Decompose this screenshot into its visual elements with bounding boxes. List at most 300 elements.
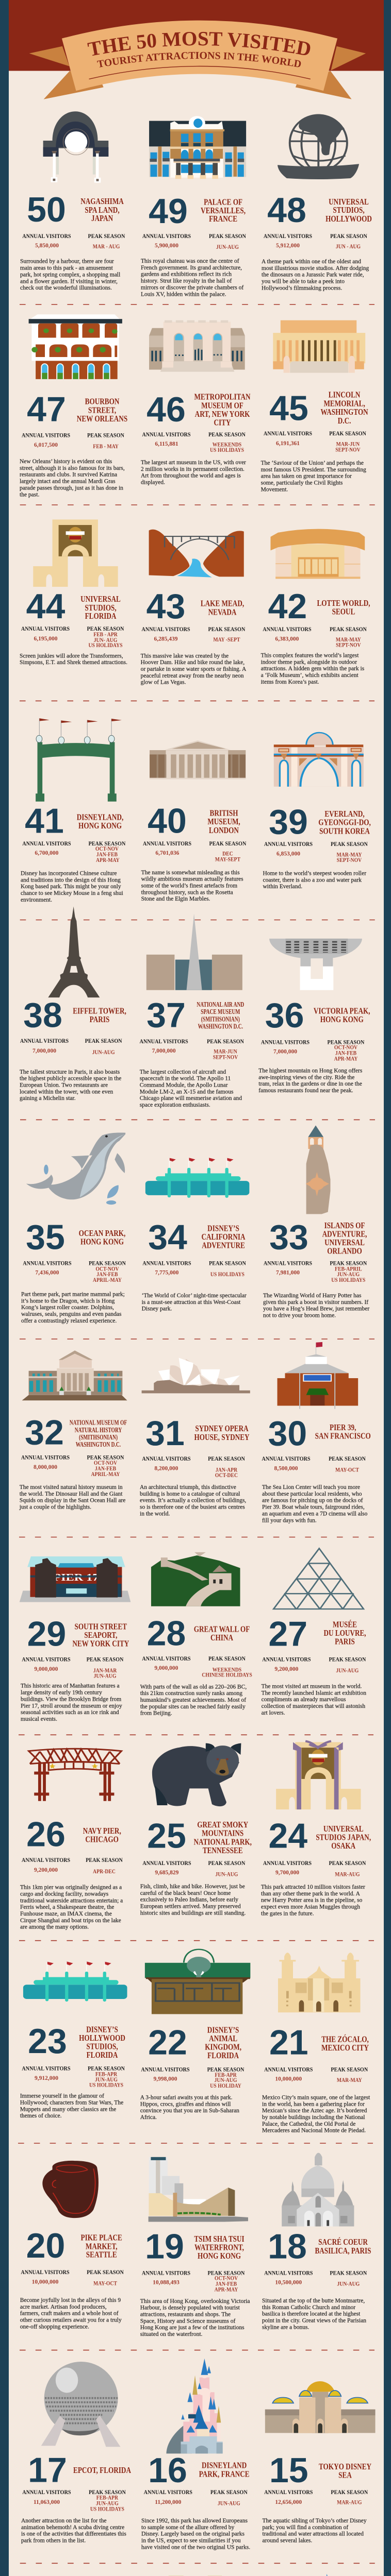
attraction 15 bbox=[262, 2381, 376, 2544]
description: offer a contrastingly relaxed experience. bbox=[21, 1318, 117, 1324]
description: acre market. Artisan food producers, bbox=[20, 2304, 107, 2310]
description: by notable buildings including the National bbox=[262, 2114, 365, 2121]
annual visitors bbox=[144, 2489, 192, 2505]
attraction 38 bbox=[20, 906, 126, 1101]
description: The Wizarding World of Harry Potter has bbox=[263, 1293, 362, 1299]
description: Kong based park. This might be your only bbox=[21, 884, 121, 890]
description: farmers, craft makers and a whole host of bbox=[20, 2311, 119, 2317]
name: NATURAL HISTORY bbox=[75, 1426, 122, 1434]
description: Disney park. bbox=[142, 1306, 172, 1312]
name: SOUTH KOREA bbox=[319, 827, 370, 836]
description: space exploration enthusiasts. bbox=[140, 1102, 210, 1108]
icon: Universal Studios Japan gate bbox=[276, 1741, 361, 1809]
annual visitors bbox=[142, 431, 191, 447]
name: FLORIDA bbox=[207, 2052, 239, 2060]
attraction 17 bbox=[21, 2362, 131, 2544]
description: coaster, there is also a zoo and water park bbox=[263, 877, 362, 883]
name: HONG KONG bbox=[80, 1238, 124, 1247]
rank: 19 bbox=[145, 2227, 184, 2266]
peak season bbox=[329, 430, 366, 453]
description: animation behemoth! A scuba diving centre bbox=[21, 2524, 124, 2531]
peak season: PEAK SEASON bbox=[87, 1656, 124, 1663]
annual visitors: 7,436,000 bbox=[35, 1270, 59, 1276]
description: one-off shopping experience. bbox=[20, 2324, 89, 2330]
name: HONG KONG bbox=[198, 2252, 241, 2261]
peak season: PEAK SEASON bbox=[88, 2065, 125, 2072]
name: (SMITHSONIAN) bbox=[79, 1433, 118, 1442]
rank: 31 bbox=[145, 1414, 185, 1453]
description: This royal chateau was once the centre of bbox=[141, 258, 239, 264]
name: NATIONAL AIR AND bbox=[197, 1000, 245, 1009]
annual visitors: 12,656,000 bbox=[275, 2499, 302, 2505]
name: STUDIOS, bbox=[85, 604, 117, 613]
annual visitors: ANNUAL VISITORS bbox=[142, 1655, 191, 1662]
description: attractions. A hidden gem within the park is bbox=[261, 666, 365, 672]
description: throughout history, such as the Rosetta bbox=[141, 889, 233, 895]
description: Module LM-2, an X-15 and the famous bbox=[140, 1089, 234, 1095]
peak season bbox=[330, 1260, 367, 1283]
peak season: JAN-FEB bbox=[96, 1271, 118, 1278]
description: the highest publicly accessible space in the bbox=[20, 1076, 121, 1082]
annual visitors bbox=[264, 2489, 313, 2505]
peak season: OCT-NOV bbox=[95, 845, 119, 852]
annual visitors bbox=[142, 1860, 191, 1876]
peak season bbox=[208, 1455, 245, 1479]
peak season: MAR-JUN bbox=[214, 1048, 237, 1055]
description: gardens and exhibitions reflect its rich bbox=[141, 272, 232, 278]
name: PARIS bbox=[90, 1015, 109, 1024]
peak season: PEAK SEASON bbox=[330, 233, 367, 240]
name bbox=[194, 2235, 245, 2261]
description: have visited one of the two original US parks. bbox=[141, 2544, 250, 2550]
name bbox=[81, 2233, 122, 2260]
peak season: SEPT-NOV bbox=[336, 642, 361, 649]
attraction 40 bbox=[141, 740, 246, 902]
description: fill your days with fun. bbox=[262, 1517, 317, 1523]
name: PIKE PLACE bbox=[81, 2233, 122, 2243]
rank: 15 bbox=[269, 2451, 308, 2490]
peak season: PEAK SEASON bbox=[328, 1039, 365, 1046]
name: SEA bbox=[338, 2471, 352, 2480]
description: Hollywood; characters from Star Wars, The bbox=[20, 2099, 123, 2106]
peak season: PEAK SEASON bbox=[209, 1260, 246, 1267]
name: PARIS bbox=[335, 1637, 355, 1647]
annual visitors: 7,981,000 bbox=[276, 1270, 300, 1276]
annual visitors bbox=[142, 1455, 191, 1471]
name: DU LOUVRE, bbox=[323, 1629, 366, 1638]
attraction 21 bbox=[262, 1953, 370, 2134]
name: MUSEUM, bbox=[207, 818, 240, 826]
description: Hoover Dam. Hike and bike round the lake, bbox=[141, 659, 245, 666]
peak season: JAN-MAR bbox=[93, 1667, 117, 1674]
description: European settlers arrived. Many preserved bbox=[140, 1904, 241, 1910]
description: you will be able to take a peek into bbox=[262, 279, 345, 285]
peak season bbox=[329, 1860, 366, 1878]
annual visitors: ANNUAL VISITORS bbox=[139, 1038, 188, 1045]
annual visitors bbox=[263, 626, 312, 642]
peak season bbox=[87, 1656, 124, 1680]
description: Space, History and Science museums of bbox=[140, 2318, 235, 2324]
peak season: FEB - MAY bbox=[93, 443, 119, 450]
name: MEXICO CITY bbox=[321, 2044, 369, 2053]
description: an aquarium and even a 7D cinema will also bbox=[262, 1511, 368, 1517]
peak season bbox=[208, 2270, 245, 2293]
name bbox=[79, 1229, 126, 1247]
icon: Hollywood Studios boat bbox=[23, 1961, 127, 2002]
name: SEATTLE bbox=[86, 2250, 117, 2260]
peak season: PEAK SEASON bbox=[330, 2270, 367, 2277]
description: Simpsons, E.T. and Shrek themed attractions. bbox=[20, 659, 127, 666]
description: in the world, has been a gathering place for bbox=[262, 2101, 365, 2107]
annual visitors bbox=[22, 1857, 70, 1873]
icon: Lake Mead canyon and bridge bbox=[149, 530, 244, 578]
name bbox=[194, 393, 251, 428]
description: events. It’s actually a collection of buildings, bbox=[140, 1498, 246, 1504]
description: so is therefore one of the busiest arts centres bbox=[140, 1504, 245, 1511]
description: traditional waterside attractions entertain; a bbox=[20, 1897, 123, 1904]
description: restaurants and clubs. It survived Katrina bbox=[20, 472, 117, 478]
peak season: OCT-NOV bbox=[95, 1266, 119, 1273]
name: PARK, FRANCE bbox=[199, 2470, 250, 2479]
rank: 17 bbox=[28, 2450, 67, 2489]
annual visitors bbox=[261, 1039, 309, 1055]
name: ADVENTURE bbox=[202, 1241, 245, 1250]
icon: Islands of Adventure tower bbox=[306, 1125, 331, 1214]
annual visitors bbox=[263, 1860, 312, 1876]
peak season: CHINESE HOLIDAYS bbox=[202, 1672, 252, 1679]
description: mirrors or discover the private chambers of bbox=[141, 284, 243, 291]
peak season: OCT-NOV bbox=[215, 2275, 238, 2282]
name: WASHINGTON D.C. bbox=[198, 1022, 243, 1030]
peak season: PEAK SEASON bbox=[331, 2066, 368, 2073]
description: The largest collection of aircraft and bbox=[140, 1069, 226, 1075]
peak season: PEAK SEASON bbox=[329, 1455, 366, 1462]
peak season: SEPT-NOV bbox=[335, 447, 361, 453]
attraction 29 bbox=[20, 1556, 131, 1722]
icon: British Museum bbox=[150, 740, 246, 779]
name bbox=[197, 1000, 245, 1030]
peak season: JAN-FEB bbox=[335, 1050, 356, 1057]
description: park; you will find a combination of bbox=[262, 2524, 348, 2531]
description: The recently launched Islamic art exhibition bbox=[262, 1690, 366, 1696]
name: GYEONGGI-DO, bbox=[318, 818, 371, 827]
peak season: PEAK SEASON bbox=[85, 1038, 122, 1044]
description: Kong’s largest roller coaster. Dolphins, bbox=[21, 1304, 114, 1311]
description: within Everland. bbox=[263, 884, 302, 890]
name bbox=[79, 2025, 125, 2060]
description: Squids on display in the Sant Ocean Hall are bbox=[20, 1498, 125, 1504]
description: This complex features the world’s largest bbox=[261, 652, 359, 658]
name: LONDON bbox=[209, 826, 239, 835]
description: skyline are a bonus. bbox=[262, 2324, 309, 2330]
rank: 18 bbox=[268, 2227, 307, 2266]
peak season bbox=[330, 233, 367, 250]
description: tram, relax in the gardens or dine in one the bbox=[258, 1081, 362, 1087]
description: in the US, expect to see similarities if you bbox=[141, 2538, 241, 2544]
description: Stone and the Elgin Marbles. bbox=[141, 896, 210, 902]
icon: Victoria Peak tower bbox=[269, 939, 362, 990]
peak season: JUN- AUG bbox=[94, 637, 117, 643]
name bbox=[205, 2026, 241, 2060]
peak season bbox=[209, 840, 246, 863]
name: FLORIDA bbox=[85, 612, 117, 621]
description: gaining a Michelin star. bbox=[20, 1095, 76, 1101]
name bbox=[80, 595, 121, 621]
annual visitors bbox=[22, 2065, 71, 2081]
annual visitors: ANNUAL VISITORS bbox=[21, 2269, 70, 2276]
name bbox=[321, 2035, 369, 2053]
attraction 13 bbox=[141, 2575, 245, 2576]
description: this Roman Catholic Church and minor bbox=[262, 2304, 355, 2311]
annual visitors bbox=[21, 2269, 70, 2285]
description: other curious retailers await you for a truly bbox=[20, 2317, 122, 2324]
name: DISNEY’S bbox=[207, 2026, 239, 2035]
name: CHINA bbox=[210, 1634, 233, 1642]
peak season: JUN-AUG bbox=[216, 244, 239, 250]
peak season: JUN-AUG bbox=[94, 1673, 116, 1680]
description: This 1km pier was originally designed as a bbox=[20, 1885, 122, 1891]
description: check out the wonderful illuminations. bbox=[20, 285, 112, 291]
annual visitors: 10,500,000 bbox=[275, 2279, 302, 2285]
name: BASILICA, PARIS bbox=[315, 2247, 371, 2256]
description: This massive lake was created by the bbox=[141, 653, 229, 659]
description: chance to see Mickey Mouse in a feng shui bbox=[21, 890, 123, 896]
attraction 45 bbox=[261, 320, 368, 493]
name: ART, NEW YORK bbox=[195, 410, 250, 419]
description: ‘The World of Color’ night-time spectacular bbox=[142, 1293, 247, 1299]
description: This area of Hong Kong, overlooking Victoria bbox=[140, 2298, 250, 2304]
icon: Pier 17 building: PIER 17 bbox=[53, 1571, 99, 1583]
name: ISLANDS OF bbox=[324, 1222, 365, 1230]
attraction 48 bbox=[262, 114, 372, 291]
peak season: FEB-APR bbox=[215, 2072, 237, 2078]
peak season: MAR-MAY bbox=[336, 636, 361, 643]
rank: 47 bbox=[27, 389, 66, 429]
rank: 23 bbox=[28, 2022, 67, 2061]
description: basilica is therefore located at the highest bbox=[262, 2311, 361, 2317]
peak season: MAR-AUG bbox=[337, 2499, 362, 2506]
peak season: WEEKENDS bbox=[213, 442, 241, 448]
rank: 30 bbox=[268, 1414, 307, 1453]
peak season bbox=[208, 431, 246, 453]
description: This historic area of Manhattan features a bbox=[21, 1683, 120, 1689]
peak season bbox=[329, 1656, 366, 1674]
name: SPA LAND, bbox=[85, 206, 120, 215]
icon: Metropolitan Museum bbox=[149, 320, 245, 372]
description: Louis XV, hidden within the palace. bbox=[141, 291, 226, 297]
description: displayed. bbox=[141, 480, 165, 486]
name: DISNEYLAND, bbox=[77, 813, 124, 822]
attraction 50 bbox=[20, 111, 125, 291]
peak season: US HOLIDAYS bbox=[89, 2082, 123, 2089]
peak season: PEAK SEASON bbox=[209, 840, 246, 847]
description: Harbour, is densely populated with tourist bbox=[140, 2305, 240, 2311]
peak season bbox=[202, 1655, 252, 1679]
annual visitors: 5,912,000 bbox=[276, 243, 300, 249]
name: ORLANDO bbox=[327, 1247, 362, 1256]
rank: 50 bbox=[27, 190, 66, 229]
rank: 42 bbox=[268, 587, 307, 626]
peak season: APR-DEC bbox=[93, 1868, 116, 1875]
peak season: MAY-OCT bbox=[93, 2280, 117, 2287]
peak season: MAY-SEPT bbox=[215, 856, 240, 863]
name: MUSÉE bbox=[333, 1620, 357, 1630]
annual visitors: ANNUAL VISITORS bbox=[142, 1260, 191, 1267]
peak season bbox=[330, 2270, 367, 2287]
annual visitors bbox=[142, 1655, 191, 1671]
rank: 46 bbox=[146, 390, 186, 429]
annual visitors bbox=[22, 840, 71, 856]
name: BRITISH bbox=[210, 809, 238, 818]
annual visitors bbox=[264, 2270, 313, 2285]
peak season bbox=[210, 2489, 248, 2507]
name: KINGDOM, bbox=[205, 2043, 241, 2052]
description: the popular sites can be reached fairly easily bbox=[140, 1704, 246, 1710]
peak season bbox=[208, 626, 245, 643]
description: With parts of the wall as old as 220–206 BC, bbox=[140, 1684, 247, 1690]
peak season: PEAK SEASON bbox=[208, 626, 245, 633]
attraction 32 bbox=[19, 1350, 127, 1511]
peak season: MAY-OCT bbox=[335, 1467, 359, 1473]
attraction 19 bbox=[140, 2157, 250, 2337]
name: (SMITHSONIAN) bbox=[201, 1015, 240, 1023]
description: items from Korea’s past. bbox=[261, 679, 319, 685]
annual visitors: ANNUAL VISITORS bbox=[141, 2066, 190, 2073]
annual visitors: ANNUAL VISITORS bbox=[264, 1260, 312, 1267]
attraction 27 bbox=[262, 1549, 366, 1716]
peak season bbox=[89, 2489, 126, 2513]
peak season: MAR-MAY bbox=[337, 2077, 362, 2083]
annual visitors: 6,191,361 bbox=[276, 440, 300, 447]
attraction 49 bbox=[141, 116, 246, 297]
name: LOTTE WORLD, bbox=[317, 599, 370, 608]
name: FLORIDA bbox=[87, 2051, 118, 2060]
rank: 16 bbox=[148, 2451, 187, 2490]
attraction 24 bbox=[261, 1741, 371, 1917]
name bbox=[77, 397, 127, 423]
peak season bbox=[331, 2489, 368, 2506]
name: WATERFRONT, bbox=[194, 2243, 244, 2252]
peak season: PEAK SEASON bbox=[329, 430, 366, 437]
icon: Louvre pyramid bbox=[273, 1549, 364, 1609]
rank: 33 bbox=[269, 1218, 308, 1257]
name: DISNEYLAND bbox=[202, 2461, 247, 2470]
rank: 32 bbox=[25, 1413, 64, 1452]
annual visitors: ANNUAL VISITORS bbox=[141, 626, 190, 633]
annual visitors: ANNUAL VISITORS bbox=[22, 432, 70, 439]
description: indoor theme park, alongside its outdoor bbox=[261, 659, 357, 665]
name: NAGASHIMA bbox=[80, 197, 124, 206]
name: HONG KONG bbox=[320, 1015, 364, 1024]
description: The name is somewhat misleading as this bbox=[141, 870, 240, 876]
peak season: MAR-JUN bbox=[336, 441, 360, 448]
peak season bbox=[87, 1454, 124, 1478]
annual visitors bbox=[142, 233, 191, 249]
icon: Tsim Sha Tsui waterfront bbox=[149, 2157, 248, 2222]
description: Palace, the Cathedral, the Old Portal de bbox=[262, 2121, 355, 2127]
annual visitors: ANNUAL VISITORS bbox=[264, 2270, 313, 2277]
description: the world. The Dinosaur Hall and the Giant bbox=[20, 1491, 123, 1497]
annual visitors: 9,000,000 bbox=[34, 1666, 58, 1672]
description: Disney. Largely based on the original parks bbox=[141, 2531, 245, 2537]
icon: Everland arch bbox=[274, 733, 364, 787]
description: exclusively to Paleo Indians, before early bbox=[140, 1897, 238, 1903]
description: New Orleans’ history is evident on this bbox=[20, 459, 112, 465]
name: NATIONAL PARK, bbox=[194, 1838, 252, 1847]
annual visitors: 5,900,000 bbox=[155, 243, 178, 249]
icon: Zocalo cathedral bbox=[278, 1953, 361, 2012]
description: awe-inspiring views of the city. Ride the bbox=[258, 1074, 354, 1080]
annual visitors bbox=[142, 1260, 191, 1276]
description: wildly ambitious museum actually features bbox=[141, 876, 243, 883]
rank: 44 bbox=[26, 587, 65, 626]
annual visitors: 6,017,500 bbox=[34, 442, 58, 448]
name: BOURBON bbox=[85, 397, 120, 406]
description: Pier 39. Boat whale tours, fairground rides, bbox=[262, 1504, 365, 1511]
annual visitors: ANNUAL VISITORS bbox=[142, 2270, 190, 2277]
icon: Pier 39 building bbox=[278, 1342, 358, 1409]
description: Mercaderes and Nacional Monte de Piedad. bbox=[262, 2128, 366, 2134]
attraction 43 bbox=[141, 530, 247, 686]
rank: 29 bbox=[27, 1614, 66, 1653]
icon: Sacre Coeur bbox=[282, 2153, 354, 2226]
icon: black bear bbox=[152, 1743, 241, 1806]
peak season bbox=[207, 1038, 244, 1061]
description: to sample some of the allure offered by bbox=[141, 2524, 234, 2531]
description: humankind’s greatest achievements. Most of bbox=[140, 1697, 246, 1703]
peak season: US HOLIDAY bbox=[210, 2082, 241, 2089]
annual visitors bbox=[262, 1656, 311, 1672]
icon: Pier 17 building bbox=[20, 1556, 131, 1602]
icon: Great Wall of China bbox=[151, 1552, 240, 1606]
peak season bbox=[87, 2269, 124, 2287]
name: STUDIOS, bbox=[333, 206, 365, 215]
rank: 26 bbox=[26, 1815, 66, 1854]
name bbox=[323, 1620, 366, 1647]
attraction 30 bbox=[262, 1342, 371, 1523]
name: LINCOLN bbox=[329, 391, 361, 400]
attraction 16 bbox=[141, 2359, 250, 2550]
description: An architectural triumph, this distinctive bbox=[140, 1484, 236, 1490]
annual visitors: ANNUAL VISITORS bbox=[143, 840, 191, 847]
name: OSAKA bbox=[331, 1842, 355, 1851]
attraction 20 bbox=[20, 2161, 124, 2330]
name: WASHINGTON bbox=[321, 408, 368, 417]
annual visitors: 7,000,000 bbox=[32, 1048, 56, 1054]
description: Mexican’s since the Aztec age. It’s bordered bbox=[262, 2108, 367, 2114]
annual visitors: ANNUAL VISITORS bbox=[21, 625, 70, 632]
description: a ‘Folk Museum’, which exhibits ancient bbox=[261, 672, 359, 679]
annual visitors: 6,195,000 bbox=[34, 636, 58, 642]
attraction 46 bbox=[141, 320, 251, 486]
peak season bbox=[208, 1860, 245, 1878]
annual visitors bbox=[264, 233, 312, 249]
description: Become joyfully lost in the alleys of this 9 bbox=[20, 2297, 121, 2303]
description: the gates in the future. bbox=[261, 1910, 314, 1917]
annual visitors: 8,200,000 bbox=[154, 1465, 178, 1471]
name bbox=[321, 391, 368, 426]
peak season: PEAK SEASON bbox=[208, 1860, 245, 1867]
annual visitors: ANNUAL VISITORS bbox=[23, 1260, 72, 1267]
name bbox=[194, 1425, 250, 1442]
annual visitors: 6,115,881 bbox=[155, 441, 178, 447]
annual visitors: ANNUAL VISITORS bbox=[22, 233, 71, 240]
peak season: MAR - AUG bbox=[93, 243, 120, 250]
name: STREET, bbox=[88, 406, 116, 415]
name: NATIONAL MUSEUM OF bbox=[70, 1418, 127, 1427]
peak season: JUN-AUG bbox=[336, 1667, 359, 1674]
name: SOUTH STREET bbox=[75, 1622, 127, 1632]
